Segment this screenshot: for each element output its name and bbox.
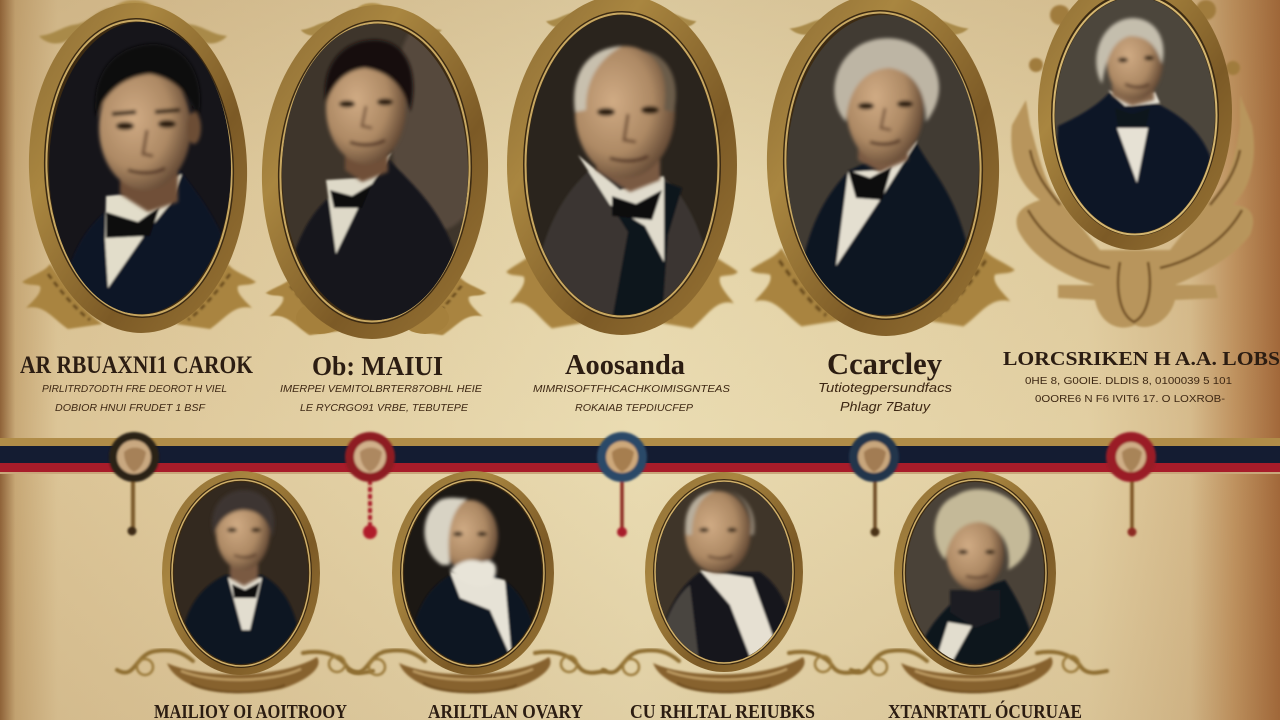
ornamental scroll band under lower portraits: [117, 650, 1107, 693]
caption: portrait 5: [1025, 375, 1232, 405]
timeline band: [0, 438, 1280, 474]
timeline marker 5: red seal: [1106, 432, 1156, 536]
caption: portrait 3: MIMRISOFTFHCACHKOIMISGNTEAS: [533, 383, 730, 395]
heading: portrait 5: LORCSRIKEN H A.A. LOBS: [1003, 348, 1280, 370]
lower portrait 3: balding man with wide collar: [645, 472, 803, 672]
portrait 3: balding gentleman: [506, 0, 738, 335]
portrait names and descriptions: top row: [20, 346, 1280, 414]
caption: portrait 4: [818, 380, 953, 414]
caption: portrait 1: [42, 383, 227, 414]
portrait 2: slim gentleman: [256, 1, 494, 343]
portrait 5: ornate scroll framed gentleman: [1011, 0, 1254, 328]
lower portrait 2: white bearded man: [392, 471, 554, 675]
caption: portrait 3: [533, 383, 730, 414]
heading: portrait 4: Ccarcley: [827, 346, 942, 381]
lower portrait 1: young man: [162, 471, 320, 675]
timeline marker 3: blue seal: [597, 432, 647, 537]
caption: portrait 2: [280, 383, 483, 414]
caption: portrait 2: LE RYCRGO91 VRBE, TEBUTEPE: [300, 402, 469, 414]
heading: portrait 2: Ob: MAIUI: [312, 351, 443, 381]
portrait 4: white haired gentleman: [750, 0, 1015, 340]
timeline marker 2: red seal with chain: [345, 432, 395, 539]
portrait 1: dark haired gentleman: [22, 0, 256, 337]
portrait names: bottom row: [154, 699, 1082, 720]
lower portrait 4: curly haired man: [894, 471, 1056, 675]
caption: portrait 5: 0OORE6 N F6 IVIT6 17. O LOXROB-: [1035, 393, 1226, 405]
caption: portrait 1: PIRLITRD7ODTH FRE DEOROT H VIEL: [42, 383, 227, 395]
caption: portrait 3: ROKAIAB TEPDIUCFEP: [575, 402, 693, 414]
heading: portrait 3: Aoosanda: [565, 349, 685, 381]
caption: portrait 1: DOBIOR HNUI FRUDET 1 BSF: [55, 402, 206, 414]
caption: portrait 4: Tutiotegpersundfacs: [818, 380, 953, 395]
caption: portrait 4: Phlagr 7Batuy: [840, 399, 932, 414]
timeline marker 4: navy seal: [849, 432, 899, 536]
caption: portrait 5: 0HE 8, G0OIE. DLDIS 8, 0100039 5 101: [1025, 375, 1232, 387]
heading: portrait 1: AR RBUAXNI1 CAROK: [20, 352, 253, 379]
caption: portrait 2: IMERPEI VEMITOLBRTER87OBHL HEIE: [280, 383, 483, 395]
timeline marker 1: bronze seal: [109, 432, 159, 536]
